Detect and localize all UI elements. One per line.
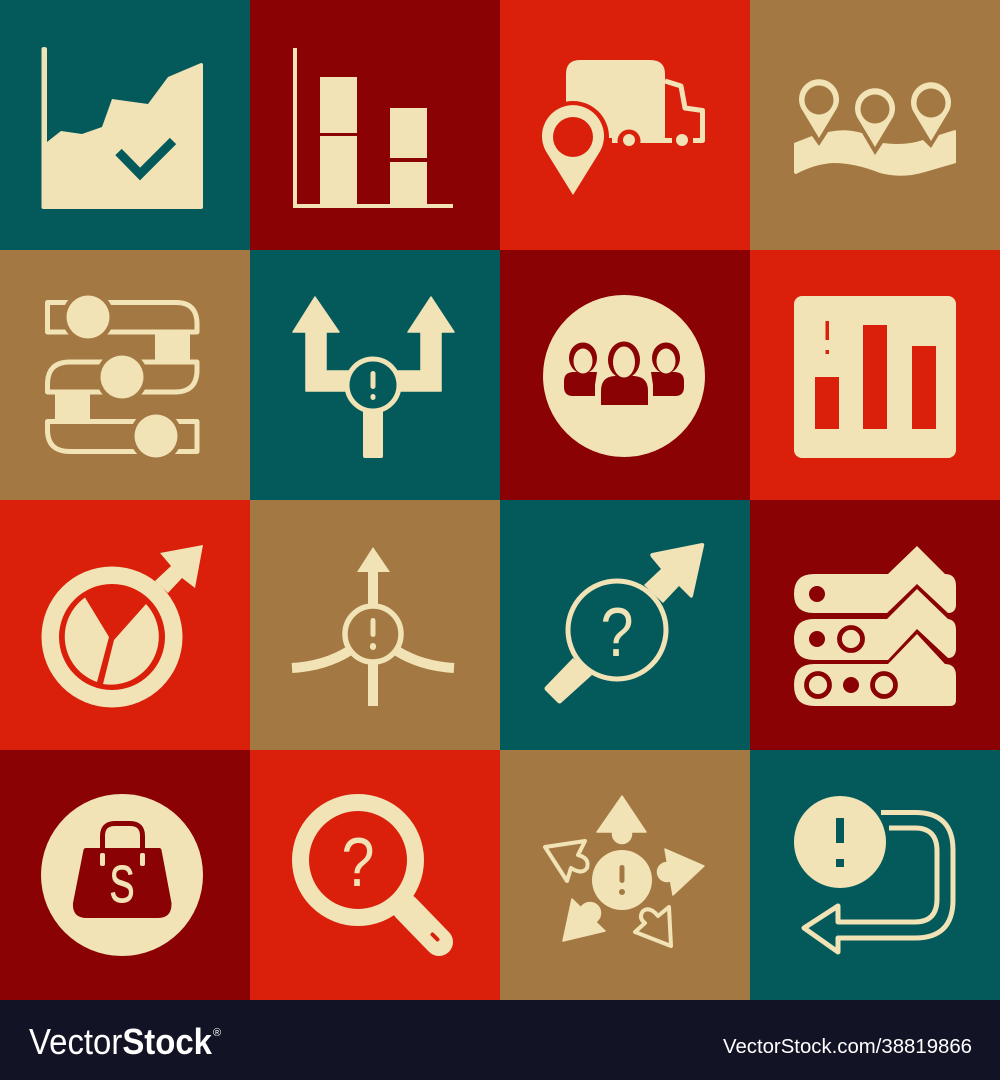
brand logo: VectorStock: [29, 1021, 213, 1062]
icon: return arrow with exclamation: [794, 796, 953, 952]
icon: bar chart with axes: [293, 48, 453, 208]
image id: VectorStock.com/38819866: [723, 1036, 972, 1058]
icon: map with three pins: [794, 79, 956, 176]
icon: area chart with check: [42, 47, 203, 209]
icon: magnifier arrow with question mark: [544, 543, 704, 704]
icon: magnifying glass with question mark: [300, 802, 439, 942]
icon: truck with location pin: [537, 60, 702, 195]
icon: crossroad arrows with exclamation: [292, 547, 454, 706]
icon: five arrows around exclamation: [545, 796, 704, 946]
footer bar: [0, 1000, 1000, 1080]
icon: split arrows with exclamation: [293, 297, 454, 458]
question mark: ?: [600, 593, 634, 671]
question mark: ?: [342, 823, 374, 901]
letter S on bag: S: [110, 856, 134, 914]
icon: shopping bag with dollar: [41, 794, 203, 956]
icon: group of people in circle: [543, 295, 705, 457]
icon: panel bar chart with exclamation: [794, 296, 956, 458]
icon: slider controls: [48, 291, 197, 462]
icon: server rows with chevrons: [794, 546, 956, 706]
icon: pie chart male symbol: [42, 545, 203, 708]
registered mark: ®: [213, 1027, 221, 1039]
